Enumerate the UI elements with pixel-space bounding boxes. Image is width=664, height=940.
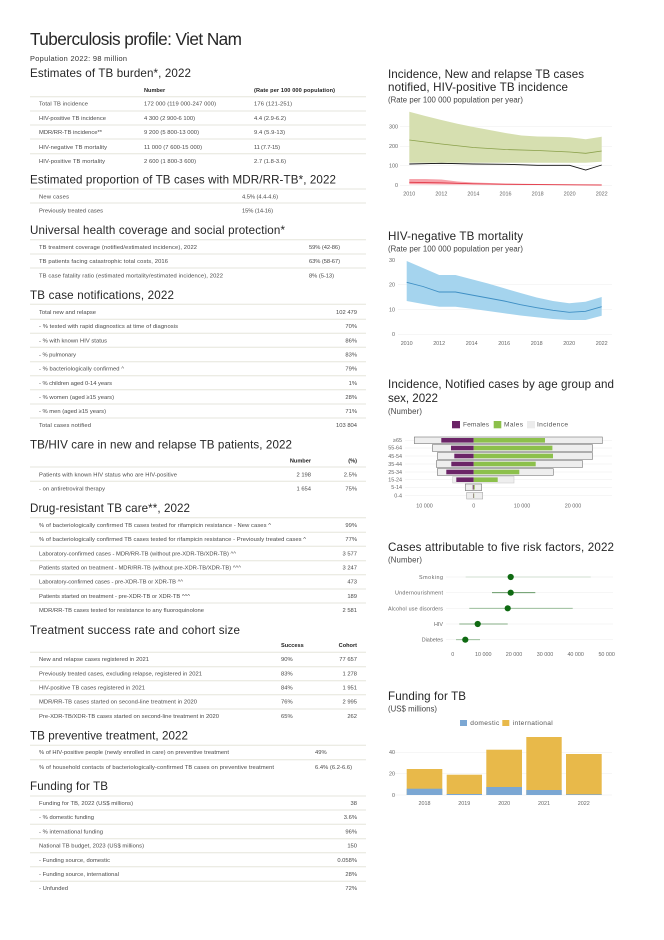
population pyramid: 10 000 (514, 504, 530, 510)
heading: Funding for TB (30, 780, 108, 793)
population pyramid: 10 000 (416, 504, 433, 510)
table (30, 518, 366, 614)
chart subtitle: (Rate per 100 000 population per year) (388, 245, 523, 254)
table: - % pulmonary (39, 353, 76, 359)
legend: Incidence (537, 422, 568, 429)
table: New cases (39, 195, 69, 201)
chart heading second line: notified, HIV-positive TB incidence (388, 81, 568, 94)
table: 38 (351, 801, 357, 807)
table: 2 995 (342, 700, 357, 706)
population pyramid: 20 000 (565, 504, 581, 510)
line chart: mortality: 2020 (563, 341, 575, 347)
table: (Rate per 100 000 population) (254, 88, 335, 94)
table: Patients started on treatment - MDR/RR-TB (without pre-XDR-TB/XDR-TB) ^^^ (39, 566, 241, 572)
dot and range chart: 40 000 (567, 652, 584, 658)
table: Number (290, 459, 312, 465)
stacked bar chart: 0 (392, 793, 395, 799)
heading: TB case notifications, 2022 (30, 289, 174, 302)
table: 3.6% (344, 815, 357, 821)
title: Tuberculosis profile: Viet Nam (30, 29, 242, 49)
table: 2.5% (344, 473, 357, 479)
table: 77 657 (339, 657, 357, 663)
line chart: mortality: 0 (392, 332, 395, 338)
line chart: incidence: 100 (389, 164, 398, 170)
legend: Males (504, 422, 524, 429)
table: 2 581 (342, 608, 357, 614)
table: HIV-positive TB incidence (39, 116, 106, 122)
table (30, 745, 366, 771)
chart heading second line: sex, 2022 (388, 392, 438, 405)
table: Laboratory-confirmed cases - MDR/RR-TB (without pre-XDR-TB/XDR-TB) ^^ (39, 552, 236, 558)
table: HIV-positive TB mortality (39, 159, 105, 165)
line chart: mortality: 2010 (401, 341, 413, 347)
table: Laboratory-confirmed cases - pre-XDR-TB or XDR-TB ^^ (39, 580, 183, 586)
table: 176 (121-251) (254, 102, 292, 108)
line chart: mortality (389, 258, 612, 347)
table: 86% (345, 339, 357, 345)
table: 0.058% (337, 858, 357, 864)
population pyramid: 0-4 (394, 494, 402, 500)
line chart: incidence: 200 (389, 144, 398, 150)
heading: TB preventive treatment, 2022 (30, 730, 188, 742)
chart subtitle: (Rate per 100 000 population per year) (388, 96, 523, 105)
stacked bar chart: 40 (389, 750, 395, 756)
table: MDR/RR-TB incidence** (39, 130, 103, 136)
table: HIV-positive TB cases registered in 2021 (39, 686, 145, 692)
table: - % bacteriologically confirmed ^ (39, 367, 124, 373)
line chart: incidence (389, 112, 612, 197)
table: TB patients facing catastrophic total costs, 2016 (39, 259, 168, 265)
table: 4 300 (2 900-6 100) (144, 116, 195, 122)
table: 99% (345, 523, 357, 529)
panel: risk factors chart (388, 541, 615, 658)
panel: universal health coverage (30, 224, 366, 280)
table (30, 304, 366, 429)
line chart: mortality: 30 (389, 258, 395, 264)
population pyramid: 25-34 (388, 470, 402, 476)
panel: TB/HIV care (30, 438, 366, 493)
panel: estimates of TB burden (30, 67, 366, 165)
table: 172 000 (119 000-247 000) (144, 102, 216, 108)
panel: age and sex chart (388, 378, 614, 510)
table: - Funding source, international (39, 872, 119, 878)
table: - % women (aged ≥15 years) (39, 395, 114, 401)
line chart: mortality: 2018 (531, 341, 543, 347)
table: 4.5% (4.4-4.6) (242, 195, 278, 201)
table: 83% (281, 672, 293, 678)
table: 28% (345, 395, 357, 401)
line chart: incidence: 2014 (467, 191, 479, 197)
table: - % men (aged ≥15 years) (39, 409, 106, 415)
table: - % children aged 0-14 years (39, 381, 112, 387)
table: 59% (42-86) (309, 245, 340, 251)
legend: Females (463, 422, 490, 429)
table: Funding for TB, 2022 (US$ millions) (39, 801, 133, 807)
table: Total new and relapse (39, 310, 96, 316)
table: - Funding source, domestic (39, 858, 110, 864)
table: 4.4 (2.9-6.2) (254, 116, 286, 122)
table: 49% (315, 750, 327, 756)
population pyramid: 5-14 (391, 485, 402, 491)
stacked bar chart (389, 737, 612, 807)
table: - % with known HIV status (39, 339, 107, 345)
table: 2 198 (296, 473, 311, 479)
table: TB treatment coverage (notified/estimated incidence), 2022 (39, 245, 197, 251)
line chart: incidence: 300 (389, 125, 398, 131)
line chart: incidence: 2016 (500, 191, 512, 197)
table: 65% (281, 714, 293, 720)
dot and range chart: 20 000 (506, 652, 522, 658)
population pyramid: 55-64 (388, 446, 402, 452)
table: 15% (14-16) (242, 209, 273, 215)
panel: treatment success rate (30, 624, 366, 720)
table: 79% (345, 367, 357, 373)
table: MDR/RR-TB cases started on second-line treatment in 2020 (39, 700, 197, 706)
table: Patients with known HIV status who are HIV-positive (39, 473, 177, 479)
line chart: mortality: 2022 (596, 341, 608, 347)
heading: Estimated proportion of TB cases with MDR/RR-TB*, 2022 (30, 174, 336, 187)
table: 90% (281, 657, 293, 663)
table: - % international funding (39, 830, 103, 836)
legend (452, 421, 568, 429)
line chart: incidence: 2020 (564, 191, 576, 197)
heading: Estimates of TB burden*, 2022 (30, 67, 191, 80)
table: % of bacteriologically confirmed TB cases tested for rifampicin resistance - New cases ^ (39, 523, 271, 529)
table: 9 200 (5 800-13 000) (144, 130, 199, 136)
stacked bar chart: 2020 (498, 801, 510, 807)
population note: Population 2022: 98 million (30, 54, 127, 63)
chart heading: Funding for TB (388, 690, 466, 703)
table: 71% (345, 409, 357, 415)
panel: HIV-negative TB mortality chart (388, 230, 612, 347)
table: National TB budget, 2023 (US$ millions) (39, 844, 144, 850)
stacked bar chart: 2019 (458, 801, 470, 807)
legend (460, 720, 553, 727)
stacked bar chart: 20 (389, 772, 395, 778)
line chart: mortality: 10 (389, 308, 395, 314)
line chart: incidence: 2010 (403, 191, 415, 197)
population pyramid: ≥65 (393, 438, 402, 444)
population pyramid: 45-54 (388, 454, 402, 460)
table: 102 479 (336, 310, 357, 316)
table: Previously treated cases, excluding relapse, registered in 2021 (39, 672, 202, 678)
table: 83% (345, 353, 357, 359)
table: 9.4 (5.9-13) (254, 130, 285, 136)
table: 75% (345, 487, 357, 493)
chart subtitle: (US$ millions) (388, 705, 437, 714)
table: Success (281, 643, 304, 649)
table: 84% (281, 686, 293, 692)
table: Pre-XDR-TB/XDR-TB cases started on second-line treatment in 2020 (39, 714, 219, 720)
table: - Unfunded (39, 886, 68, 892)
dot and range chart: Alcohol use disorders (388, 606, 443, 612)
table: 76% (281, 700, 293, 706)
population pyramid: 35-44 (388, 462, 402, 468)
chart heading: Incidence, New and relapse TB cases (388, 68, 584, 81)
line chart: incidence: 2012 (435, 191, 447, 197)
table: Previously treated cases (39, 209, 103, 215)
stacked bar chart: 2018 (418, 801, 430, 807)
table: 72% (345, 886, 357, 892)
heading: TB/HIV care in new and relapse TB patients, 2022 (30, 438, 292, 452)
table: 96% (345, 830, 357, 836)
panel: TB case notifications (30, 289, 366, 429)
table: 1 654 (296, 487, 312, 493)
dot and range chart: Diabetes (422, 638, 443, 644)
line chart: incidence: 2022 (596, 191, 608, 197)
heading: Drug-resistant TB care**, 2022 (30, 502, 190, 515)
chart subtitle: (Number) (388, 407, 422, 416)
table: 3 577 (342, 552, 357, 558)
population pyramid (388, 437, 612, 510)
table: 2.7 (1.8-3.6) (254, 159, 286, 165)
chart heading: HIV-negative TB mortality (388, 230, 523, 243)
table: 11 000 (7 600-15 000) (144, 145, 202, 151)
table (30, 796, 366, 892)
table: MDR/RR-TB cases tested for resistance to any fluoroquinolone (39, 608, 204, 614)
table: Cohort (339, 643, 357, 649)
table (30, 459, 366, 493)
panel: funding for TB table (30, 780, 366, 892)
table: 473 (347, 580, 357, 586)
table: 6.4% (6.2-6.6) (315, 765, 352, 771)
panel: MDR/RR-TB proportion (30, 174, 366, 215)
line chart: mortality: 2016 (498, 341, 510, 347)
table: 11 (7.7-15) (254, 145, 280, 151)
stacked bar chart: 2021 (538, 801, 550, 807)
stacked bar chart: 2022 (578, 801, 590, 807)
heading: Universal health coverage and social protection* (30, 224, 285, 237)
table: 1 278 (342, 672, 357, 678)
table: - on antiretroviral therapy (39, 487, 105, 493)
table (30, 189, 366, 215)
table: Total TB incidence (39, 102, 88, 108)
panel: drug-resistant TB care (30, 502, 366, 614)
table: 70% (345, 324, 357, 330)
legend: international (513, 720, 553, 727)
table: 77% (345, 537, 357, 543)
table (30, 88, 366, 165)
table: 1 951 (342, 686, 357, 692)
table: - % tested with rapid diagnostics at time of diagnosis (39, 324, 178, 330)
line chart: mortality: 20 (389, 283, 395, 289)
dot and range chart (388, 574, 615, 658)
heading: Treatment success rate and cohort size (30, 624, 240, 637)
table: 103 804 (336, 423, 358, 429)
table: 262 (347, 714, 357, 720)
table (30, 240, 366, 280)
table: TB case fatality ratio (estimated mortality/estimated incidence), 2022 (39, 274, 223, 280)
table: 3 247 (342, 566, 357, 572)
table (30, 643, 366, 720)
panel: incidence chart (388, 68, 612, 197)
dot and range chart: HIV (434, 622, 443, 628)
table: % of bacteriologically confirmed TB cases tested for rifampicin resistance - Previously treated cases ^ (39, 537, 306, 543)
dot and range chart: 0 (451, 652, 454, 658)
chart subtitle: (Number) (388, 556, 422, 565)
table: New and relapse cases registered in 2021 (39, 657, 149, 663)
table: HIV-negative TB mortality (39, 145, 107, 151)
table: 28% (345, 872, 357, 878)
population pyramid: 0 (472, 504, 475, 510)
dot and range chart: Undernourishment (395, 591, 444, 597)
table: Total cases notified (39, 423, 91, 429)
dot and range chart: Smoking (419, 575, 443, 581)
panel: TB preventive treatment (30, 730, 366, 771)
dot and range chart: 10 000 (475, 652, 492, 658)
table: 8% (5-13) (309, 274, 334, 280)
table: Patients started on treatment - pre-XDR-TB or XDR-TB ^^^ (39, 594, 190, 600)
legend: domestic (470, 720, 500, 727)
line chart: mortality: 2014 (466, 341, 478, 347)
panel: funding chart (388, 690, 612, 807)
dot and range chart: 30 000 (537, 652, 553, 658)
table: Number (144, 88, 166, 94)
dot and range chart: 50 000 (598, 652, 615, 658)
table: 189 (347, 594, 357, 600)
table: 63% (58-67) (309, 259, 340, 265)
line chart: mortality: 2012 (433, 341, 445, 347)
line chart: incidence: 0 (395, 183, 398, 189)
table: % of household contacts of bacteriologically-confirmed TB cases on preventive treatment (39, 765, 274, 771)
table: % of HIV-positive people (newly enrolled in care) on preventive treatment (39, 750, 229, 756)
table: (%) (348, 459, 357, 465)
chart heading: Cases attributable to five risk factors, 2022 (388, 541, 614, 554)
table: - % domestic funding (39, 815, 94, 821)
chart heading: Incidence, Notified cases by age group and (388, 378, 614, 391)
line chart: incidence: 2018 (532, 191, 544, 197)
table: 150 (347, 844, 357, 850)
table: 1% (349, 381, 357, 387)
table: 2 600 (1 800-3 600) (144, 159, 196, 165)
population pyramid: 15-24 (388, 478, 402, 484)
